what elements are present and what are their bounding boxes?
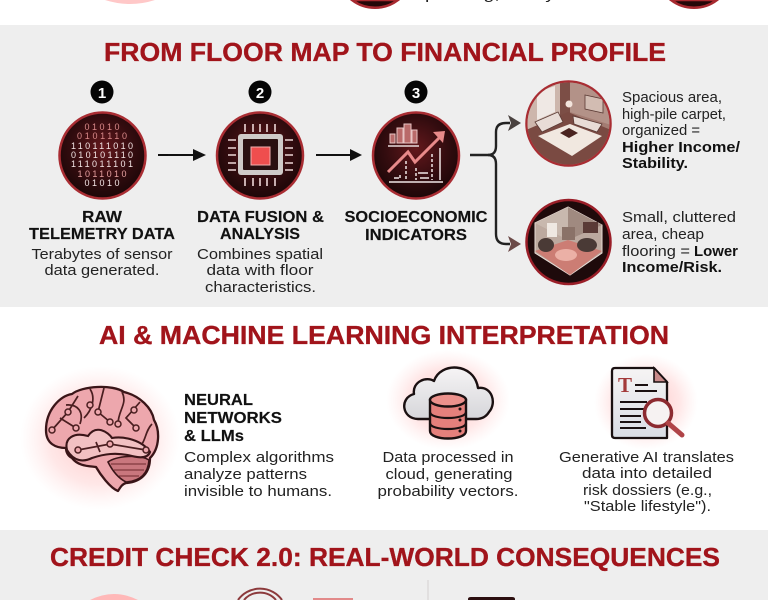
top section remnant (0, 0, 768, 25)
text: lower income: flooring = (622, 243, 690, 260)
icon: partial red box (313, 598, 353, 600)
text: neural networks: invisible to humans. (184, 483, 332, 500)
step badge 2: 2 (256, 85, 264, 102)
text: higher income: high-pile carpet, (622, 106, 726, 123)
text: higher income: Higher Income/ (622, 139, 741, 156)
arrow: bracket split (470, 115, 521, 252)
text: lower income: area, cheap (622, 226, 704, 243)
step 1 text: data generated. (44, 262, 160, 279)
icon: binary telemetry data: 010101110 (71, 150, 133, 160)
step 2 text: characteristics. (205, 279, 316, 296)
step 1 text: RAW (82, 209, 122, 226)
step badge 2 (248, 80, 272, 104)
text: lower income: Small, cluttered (622, 209, 736, 226)
text: higher income: organized = (622, 122, 700, 139)
icon: socioeconomic chart (373, 112, 459, 198)
icon: binary telemetry data: 01010 (84, 178, 120, 188)
step badge 1 (90, 80, 114, 104)
icon: document with magnifier (594, 354, 698, 450)
text: cloud processing (378, 449, 518, 500)
text: lower income (622, 209, 738, 276)
heading: from floor map: FROM FLOOR MAP TO FINANCIAL PROFILE (104, 37, 666, 67)
text: cloud processing: probability vectors. (378, 483, 518, 500)
heading: ai and ml: AI & MACHINE LEARNING INTERPRETATION (99, 320, 669, 350)
panel: ai and machine learning (0, 307, 768, 530)
text: generative ai: "Stable lifestyle"). (584, 498, 711, 515)
text: lower income: Lower (694, 243, 738, 260)
step badge 3: 3 (412, 85, 420, 102)
panel: from floor map to financial profile (0, 25, 768, 307)
icon: binary telemetry data: 1011010 (78, 169, 126, 179)
text: higher income: Spacious area, (622, 89, 722, 106)
step badge 1: 1 (98, 85, 106, 102)
step 2 text: Combines spatial (197, 246, 323, 263)
panel: credit check 2.0 (0, 530, 768, 600)
icon: binary telemetry data (60, 112, 146, 198)
arrow: step 2 to 3 (316, 149, 362, 161)
column divider (427, 580, 429, 600)
text: generative ai: data into detailed (582, 465, 712, 482)
step 2 text: DATA FUSION & (197, 209, 324, 226)
icon: partial glow (90, 594, 138, 600)
text: higher income: Stability. (622, 155, 688, 172)
step 3 text (344, 209, 488, 244)
icon: binary telemetry data: 111011101 (71, 159, 133, 169)
step 2 text: ANALYSIS (220, 226, 300, 243)
step 2 text (197, 209, 324, 296)
text: generative ai: risk dossiers (e.g., (583, 482, 712, 499)
arrow: step 1 to 2 (158, 149, 206, 161)
text: neural networks: & LLMs (184, 428, 244, 445)
text: neural networks: analyze patterns (184, 466, 307, 483)
step badge 3 (404, 80, 428, 104)
step 1 text: TELEMETRY DATA (29, 226, 175, 243)
text: cloud processing: Data processed in (382, 449, 514, 466)
text: neural networks: Complex algorithms (184, 449, 334, 466)
text: neural networks (184, 392, 334, 500)
icon: cloud database (386, 350, 510, 450)
icon: binary telemetry data: 01010 (84, 122, 120, 132)
step 3 text: SOCIOECONOMIC (344, 209, 488, 226)
step 3 text: INDICATORS (365, 227, 467, 244)
heading: credit check: CREDIT CHECK 2.0: REAL-WORLD CONSEQUENCES (50, 542, 720, 572)
icon: cluttered room (526, 200, 610, 284)
icon: binary telemetry data: 110111010 (71, 141, 133, 151)
icon: chip data fusion (217, 112, 303, 198)
text: lower income: Income/Risk. (622, 259, 722, 276)
step 2 text: data with floor (206, 262, 314, 279)
icon: brain (20, 366, 180, 510)
text: generative ai (559, 449, 734, 515)
text: higher income (622, 89, 741, 172)
icon: partial rings (238, 589, 282, 600)
text: cloud processing: cloud, generating (386, 466, 512, 483)
step 1 text (29, 209, 175, 279)
text: generative ai: Generative AI translates (559, 449, 734, 466)
text: neural networks: NEURAL (184, 392, 253, 409)
icon: document with magnifier: T (618, 373, 632, 397)
icon: binary telemetry data: 0101110 (77, 131, 127, 141)
icon: spacious room (526, 81, 611, 166)
step 1 text: Terabytes of sensor (32, 246, 172, 263)
text: neural networks: NETWORKS (184, 410, 282, 427)
icon: partial dark box (468, 597, 515, 600)
